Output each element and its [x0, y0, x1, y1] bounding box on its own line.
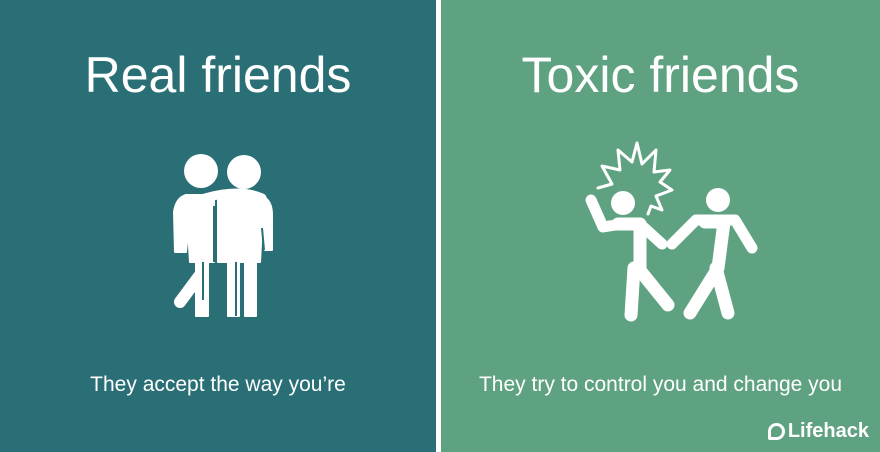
- title: toxic friends: Toxic friends: [522, 47, 799, 103]
- logo: lifehack: Lifehack: [788, 420, 869, 442]
- panel: real friends: [0, 0, 436, 452]
- icon: two friends hugging: [173, 154, 273, 317]
- title: real friends: Real friends: [85, 47, 351, 103]
- panel: toxic friends: [441, 0, 880, 452]
- right person: [218, 196, 272, 316]
- caption: toxic friends: They try to control you and change you: [479, 373, 842, 396]
- left person: [174, 195, 214, 316]
- caption: real friends: They accept the way you’re: [90, 373, 346, 396]
